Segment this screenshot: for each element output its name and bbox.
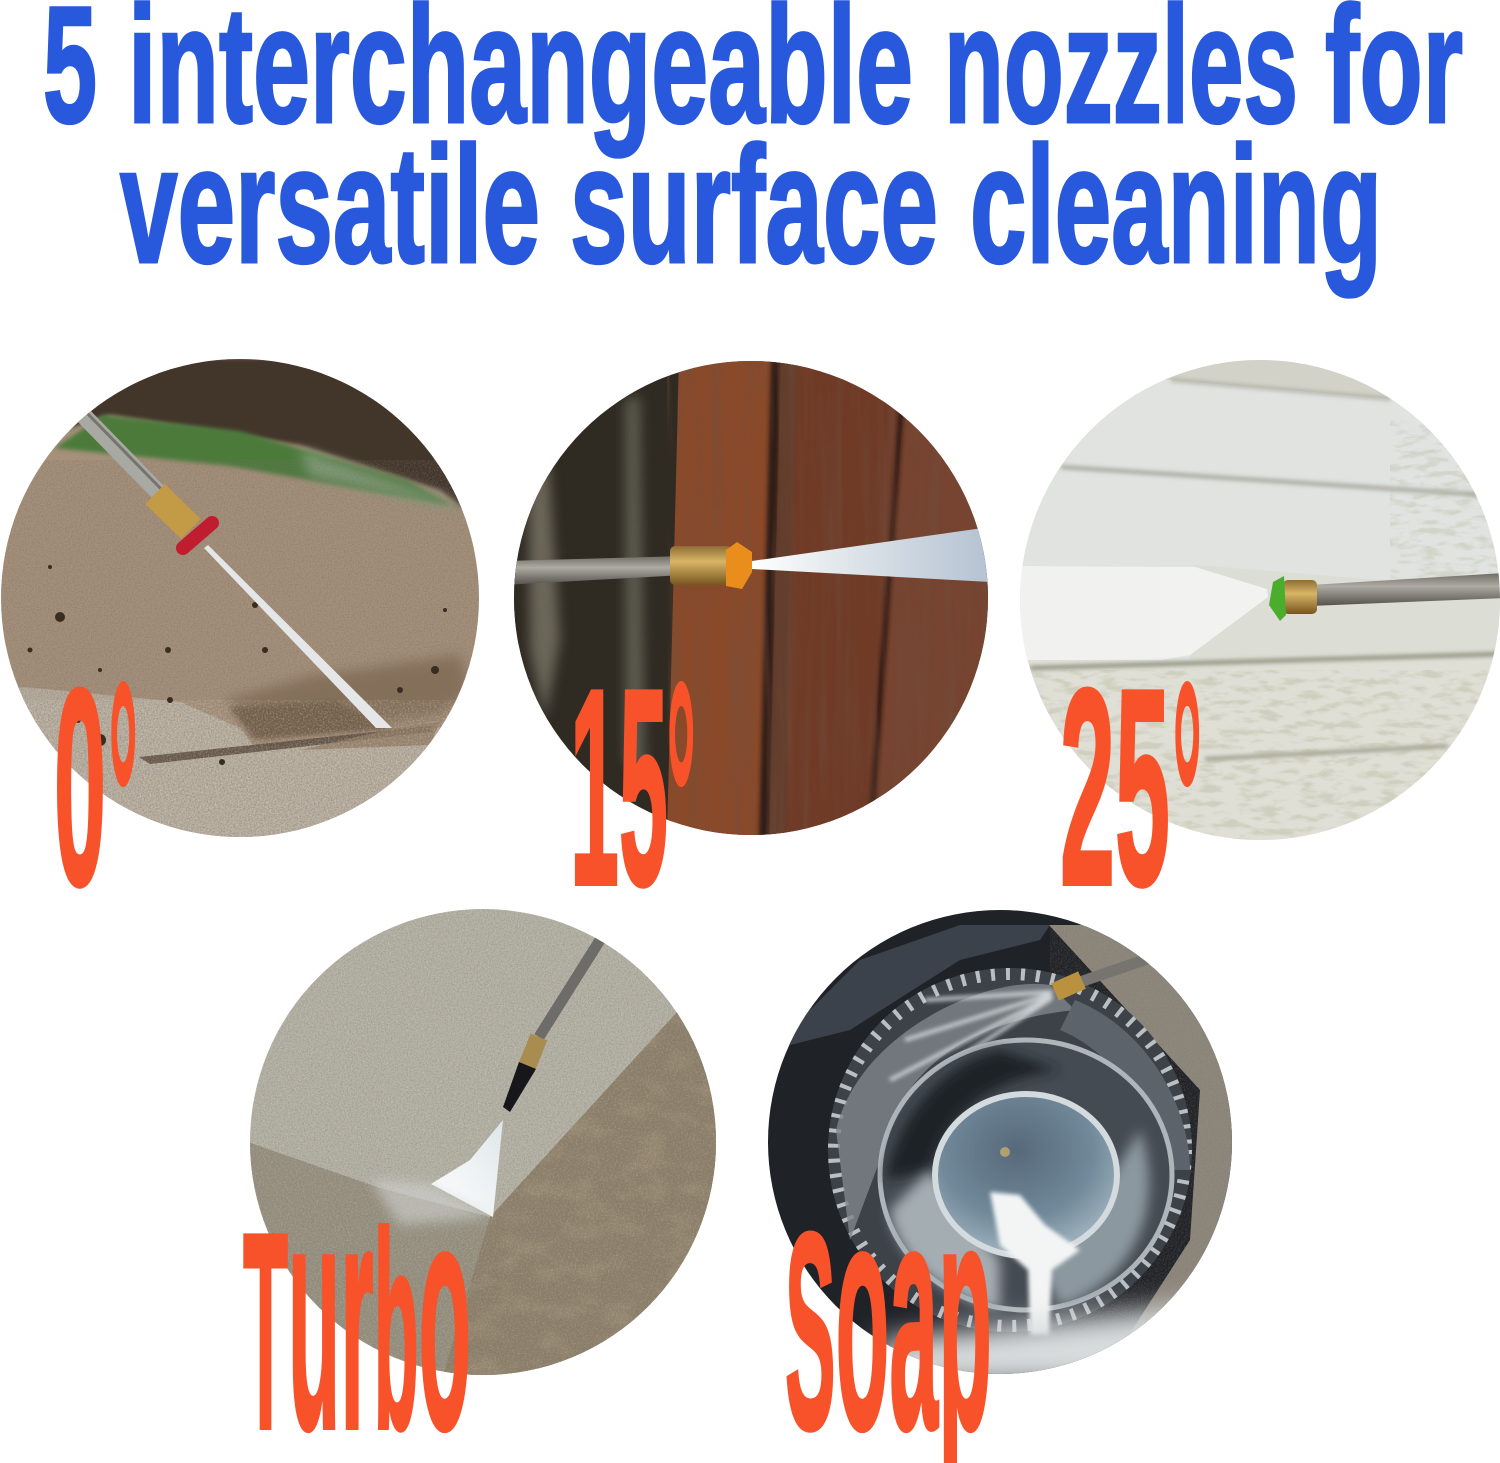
- icon: soap wand: [1055, 958, 1150, 992]
- label: 0 degrees: °: [108, 610, 138, 995]
- panel: 25 degree nozzle photo: [1015, 358, 1500, 842]
- panel: 0 degree nozzle photo: [0, 358, 480, 840]
- text: 15: [570, 632, 668, 944]
- label: 25 degrees: °: [1172, 610, 1202, 995]
- label: 15 degrees: °: [666, 610, 696, 995]
- label: 0 degrees: 0: [54, 632, 106, 944]
- label: 25 degrees: [1060, 610, 1202, 995]
- panel: 15 degree nozzle photo: [505, 358, 990, 838]
- label: 15 degrees: [570, 610, 696, 995]
- icon: 15 degree wand: [505, 527, 990, 589]
- icon: 0 degree wand: [80, 412, 392, 728]
- title: [43, 0, 1463, 298]
- icon: 25 degree wand: [1269, 573, 1500, 621]
- label: 0 degrees: [54, 610, 138, 995]
- icon: turbo wand: [370, 940, 600, 1225]
- text: 25: [1060, 632, 1170, 944]
- title: versatile: [120, 113, 540, 298]
- title: surface: [570, 113, 938, 298]
- panel: turbo nozzle photo: [245, 905, 725, 1385]
- panel: soap nozzle photo: [765, 905, 1240, 1385]
